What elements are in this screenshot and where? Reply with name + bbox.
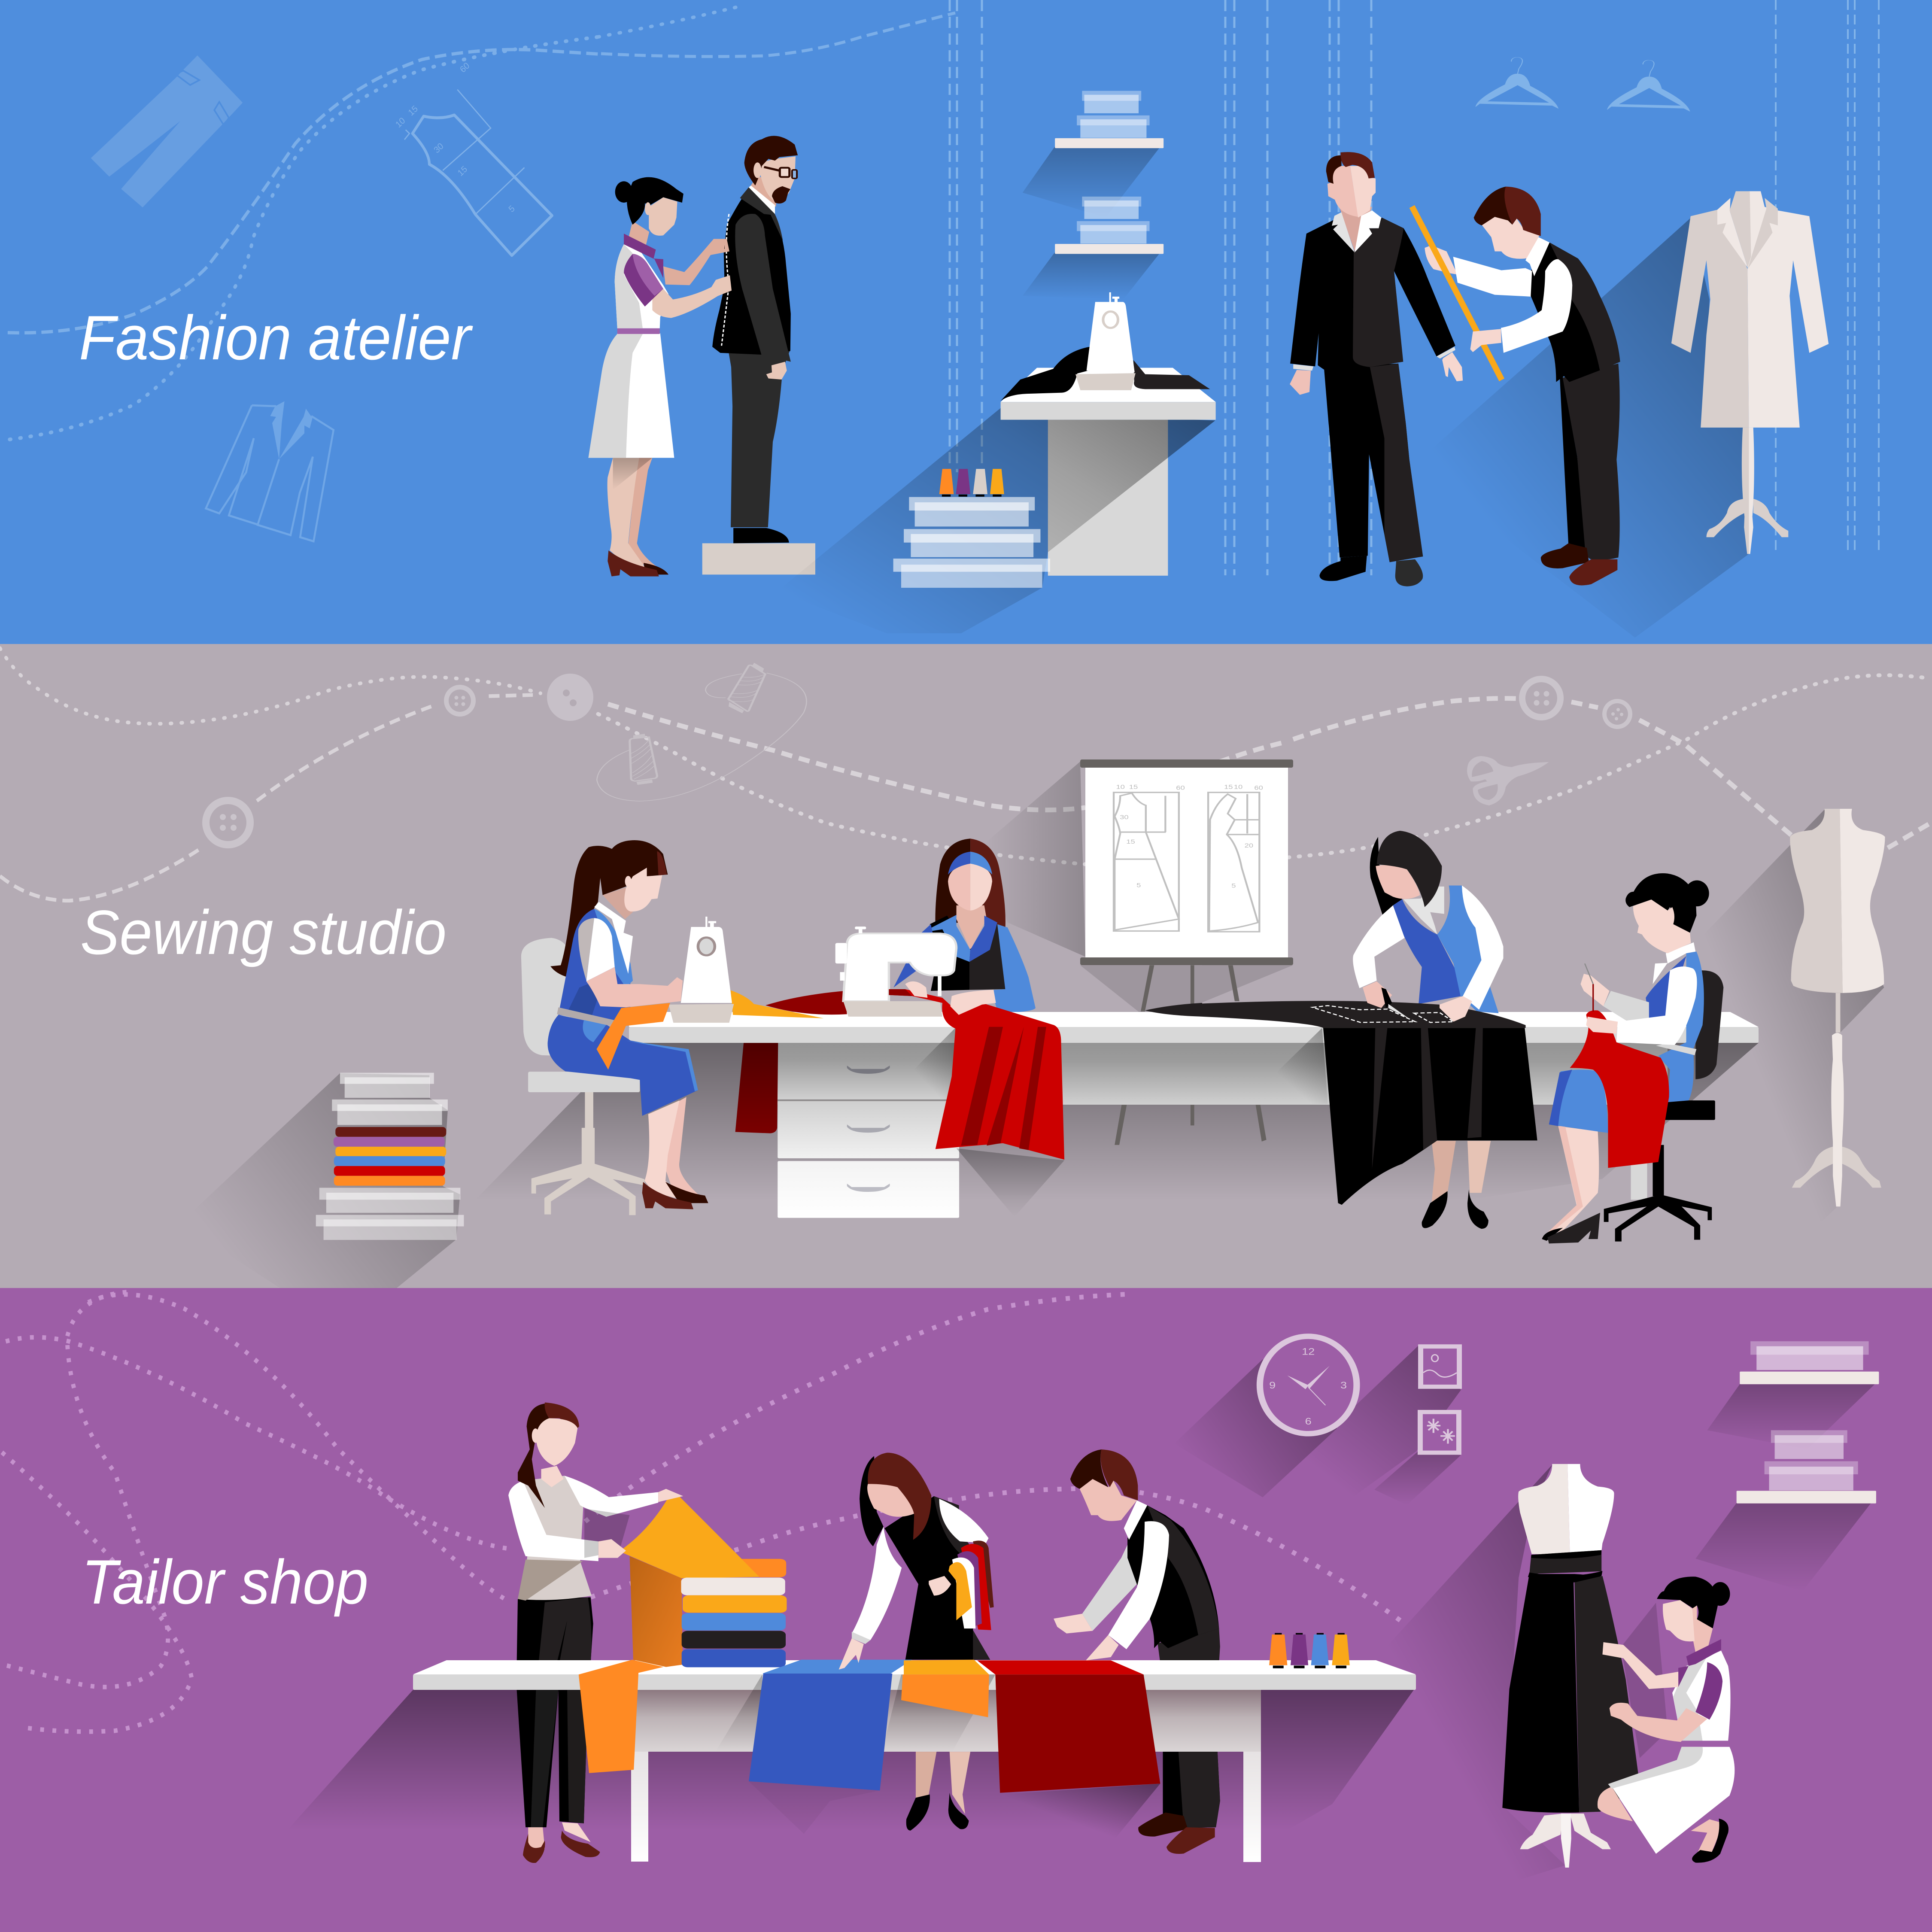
icon: dress pattern sketch: 15 <box>456 164 469 178</box>
figure: woman cutting black fabric <box>1202 831 1537 1229</box>
dotted stitch lines <box>0 1292 1405 1732</box>
shadow of coat stand <box>1412 218 1749 638</box>
figure: seated woman hand sewing red fabric <box>1542 873 1723 1243</box>
dress pattern right <box>1208 784 1263 932</box>
icon: big button right <box>1519 676 1564 720</box>
fabric on table <box>1001 347 1210 401</box>
icon: scissors <box>1467 756 1549 805</box>
tapered end of black cloth <box>1145 1003 1202 1017</box>
stitched curve lines <box>8 6 955 440</box>
dress pattern right: 20 <box>1245 842 1253 849</box>
dress pattern left: 10 <box>1116 784 1125 790</box>
folded fabric stack <box>681 1559 787 1667</box>
icon: thread spools outline <box>597 663 807 801</box>
wall object shadows <box>1174 1346 1875 1884</box>
figure: client with glasses on step <box>702 136 815 574</box>
stacked fabric boxes <box>893 497 1050 588</box>
icon: dress pattern sketch: 60 <box>459 61 471 75</box>
icon: four-hole button left <box>202 797 254 848</box>
dress pattern right: 15 <box>1224 784 1233 790</box>
icon: wall clock: 9 <box>1269 1380 1276 1391</box>
dress pattern left: 15 <box>1126 839 1135 845</box>
icon: jacket sketch <box>206 401 334 541</box>
workbench with sewing machine, thread and fabric stacks <box>777 91 1216 633</box>
icon: wall clock: 3 <box>1340 1380 1347 1391</box>
heading: Tailor shop: Tailor shop <box>82 1547 368 1617</box>
icon: picture frame flowers <box>1420 1412 1459 1452</box>
dress pattern right: 5 <box>1231 883 1236 889</box>
icon: picture frame landscape <box>1421 1346 1459 1387</box>
thread spools <box>1269 1633 1350 1668</box>
figure: seamstress and bearded client <box>588 136 815 576</box>
icons: hangers <box>1476 57 1690 112</box>
icon: side sewing machine <box>835 927 957 1017</box>
mannequin with stand <box>1691 809 1885 1288</box>
icon: trousers sketch <box>91 55 243 207</box>
long table floor shadow <box>280 1690 1414 1855</box>
icon: upright sewing machine <box>669 917 734 1023</box>
heading: Fashion atelier: Fashion atelier <box>79 303 473 373</box>
figure: bending tailor <box>1425 187 1620 585</box>
tailor measuring a man, coat on a stand <box>1290 152 1829 638</box>
icon: dress pattern sketch: 15 <box>407 104 420 118</box>
figure: woman with fabric samples <box>839 1453 994 1831</box>
easel legs <box>1115 965 1267 1145</box>
dress pattern left: 15 <box>1129 784 1138 790</box>
figure: woman holding yellow fabric <box>508 1403 658 1863</box>
drawers <box>735 1043 1064 1218</box>
table floor shadow <box>472 1043 1759 1228</box>
long display table <box>413 1660 1416 1862</box>
cast shadows on the apron <box>715 1674 1160 1844</box>
table apron <box>778 1043 1668 1105</box>
sewing machine <box>1075 292 1136 390</box>
red fabric <box>977 1660 1160 1793</box>
figure: seated woman with ponytail and chair <box>521 840 708 1215</box>
icon: two-hole button <box>547 674 593 721</box>
figure shadow on table apron <box>887 1027 957 1100</box>
dress pattern left: 30 <box>1120 814 1129 820</box>
seamstress hands on the jacket <box>709 239 732 296</box>
cutting and sewing table <box>521 831 1759 1243</box>
dress pattern right: 10 <box>1234 784 1242 790</box>
fabrics on long table <box>579 1489 1160 1844</box>
dress pattern left: 5 <box>1136 882 1141 889</box>
vertical stitch lines <box>950 0 1879 575</box>
table top and front <box>629 1012 1759 1027</box>
coat on stand <box>1671 191 1829 554</box>
table <box>777 368 1216 633</box>
panel: Sewing studio <box>0 644 1932 1288</box>
icon: dress pattern sketch <box>394 61 552 255</box>
icon: wall clock <box>1260 1337 1357 1434</box>
thread spools <box>939 469 1004 497</box>
icon: dress pattern sketch: 10 <box>394 116 407 130</box>
icon: wall clock: 6 <box>1305 1416 1312 1427</box>
heading: Sewing studio: Sewing studio <box>80 897 447 967</box>
pattern flipchart <box>984 759 1293 1145</box>
icon: dress pattern sketch: 30 <box>432 141 445 155</box>
chart board <box>1085 768 1288 957</box>
blue fabric <box>749 1660 912 1790</box>
figure: seamstress <box>588 177 732 576</box>
wall clock, frames and shelves <box>1174 1337 1879 1884</box>
panel: Fashion atelier <box>0 0 1932 644</box>
icon: wall clock: 12 <box>1302 1346 1315 1357</box>
wall shelves with boxes <box>1737 1341 1879 1504</box>
dress pattern left <box>1114 784 1185 931</box>
icon: small button right <box>1602 699 1632 729</box>
figures behind the table <box>508 1403 1220 1863</box>
thread spools and dress mannequin <box>1269 1464 1735 1868</box>
figure: kneeling dressmaker <box>1598 1577 1735 1863</box>
shelves with boxes <box>1023 91 1163 299</box>
figure: standing client <box>1290 152 1463 586</box>
orange fabric <box>901 1660 989 1717</box>
fabric and sewing machines <box>669 917 1202 1160</box>
pointing hands <box>839 1635 1119 1670</box>
dress pattern left: 60 <box>1176 785 1185 791</box>
red fabric <box>889 989 1064 1160</box>
dress pattern right: 60 <box>1254 785 1263 791</box>
panel: Tailor shop <box>0 1288 1932 1932</box>
yellow fabric being lifted <box>579 1489 759 1773</box>
tailor front hand <box>1470 329 1501 352</box>
icon: dress pattern sketch: 5 <box>507 204 516 214</box>
figure: man in waistcoat <box>1054 1449 1220 1854</box>
measuring ruler <box>1410 205 1504 381</box>
stitched thread lines <box>0 648 1932 901</box>
stack of folded fabric <box>180 1073 464 1288</box>
mannequin with black skirt <box>1502 1464 1640 1868</box>
icon: small button <box>444 685 476 717</box>
chart shadow <box>984 762 1202 1015</box>
figure: woman behind table with headband <box>893 838 1036 1013</box>
